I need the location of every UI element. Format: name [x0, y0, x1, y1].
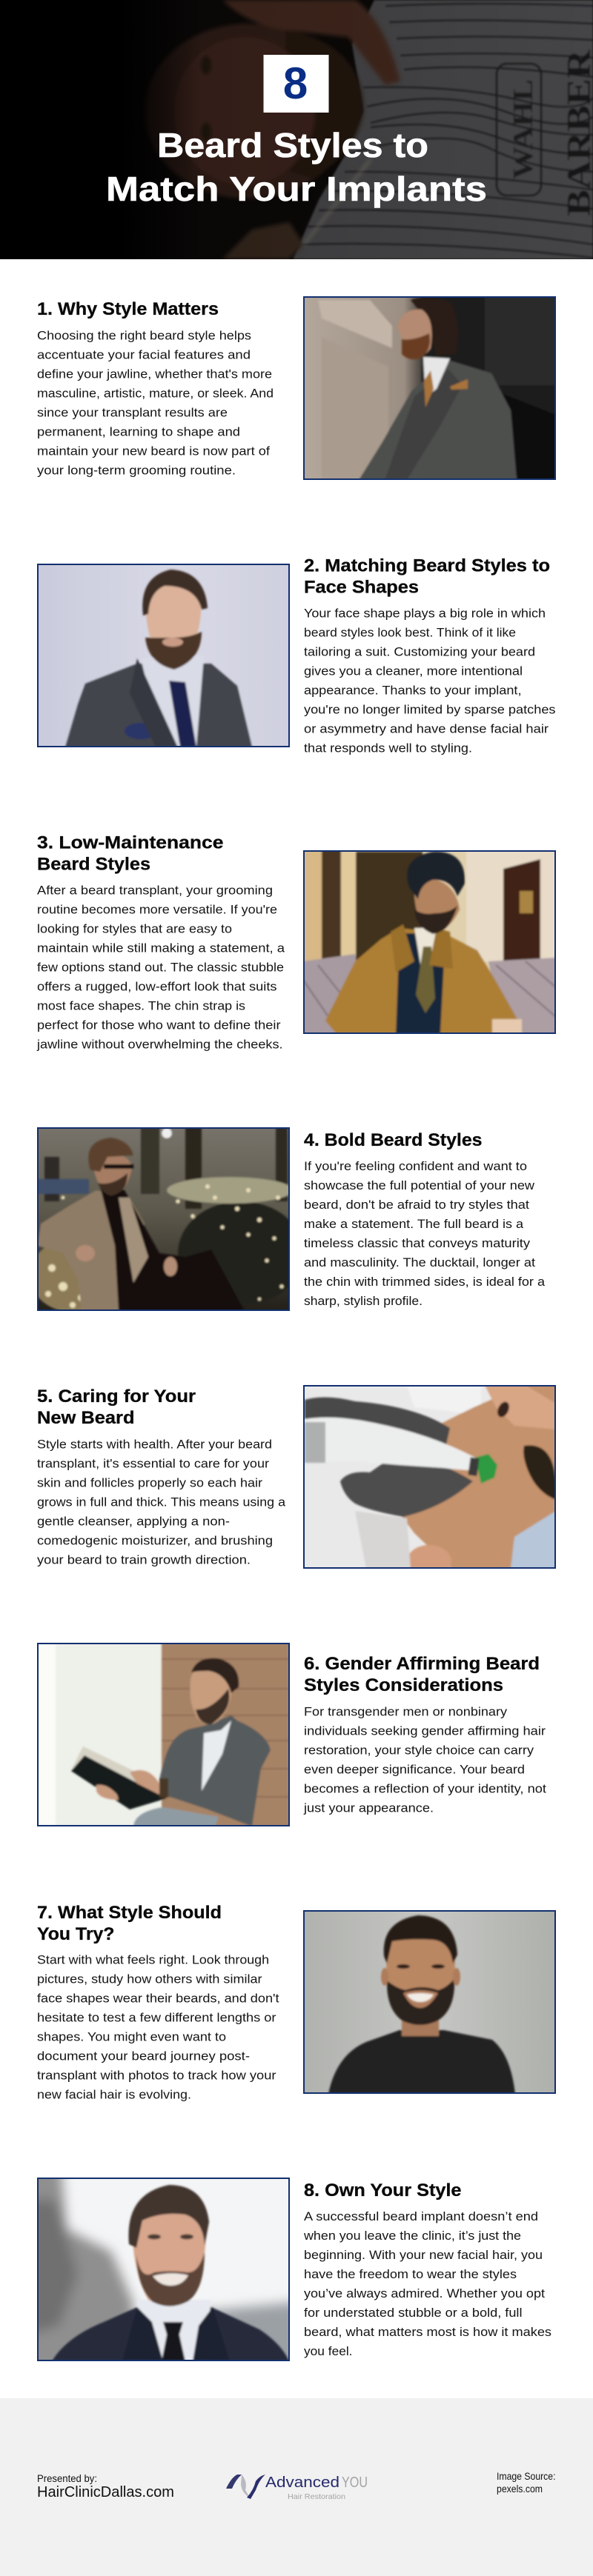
section 7 text: shapes. You might even want to	[37, 2031, 226, 2044]
section 1 text: define your jawline, whether that's more	[37, 367, 272, 381]
section 4 text: 4. Bold Beard Styles	[304, 1130, 482, 1150]
section 6 text: For transgender men or nonbinary	[304, 1705, 508, 1718]
title	[106, 126, 487, 208]
section 5 text: your beard to train growth direction.	[37, 1554, 251, 1567]
section 7 text: Start with what feels right. Look through	[37, 1954, 269, 1967]
logo: AdvancedYOU: Hair Restoration	[288, 2492, 345, 2501]
presented by	[37, 2472, 174, 2500]
section 7 text: hesitate to test a few different lengths or	[37, 2012, 276, 2025]
section 4 text: beard, don't be afraid to try styles that	[304, 1198, 529, 1212]
footer	[0, 2398, 593, 2576]
logo: AdvancedYOU: Advanced	[265, 2475, 339, 2491]
section 7 text: 7. What Style Should	[37, 1903, 222, 1923]
presented by: HairClinicDallas.com	[37, 2484, 174, 2500]
section 3 text: perfect for those who want to define their	[37, 1019, 281, 1032]
section 3 text	[36, 832, 285, 1052]
section 7 text: transplant with photos to track how your	[37, 2069, 276, 2083]
photo 5: laser treatment on beard	[303, 1385, 556, 1578]
section 1 text: 1. Why Style Matters	[37, 299, 219, 319]
section 4 text: timeless classic that conveys maturity	[304, 1237, 531, 1250]
section 6 text: becomes a reflection of your identity, not	[304, 1782, 546, 1795]
section 8 text	[303, 2180, 551, 2358]
section 4 text	[304, 1130, 546, 1308]
section 2 text: or asymmetry and have dense facial hair	[304, 723, 549, 736]
section 3 text: most face shapes. The chin strap is	[37, 1000, 245, 1013]
section 2 text: that responds well to styling.	[304, 742, 472, 755]
section 8 text: for understated stubble or a bold, full	[304, 2306, 522, 2320]
section 8 text: have the freedom to wear the styles	[304, 2268, 517, 2281]
section 6 text: individuals seeking gender affirming hair	[304, 1724, 546, 1738]
section 7 text: new facial hair is evolving.	[37, 2089, 191, 2102]
section 4 text: make a statement. The full beard is a	[304, 1218, 524, 1231]
section 2 text: gives you a cleaner, more intentional	[304, 665, 523, 678]
section 5 text: 5. Caring for Your	[37, 1387, 196, 1407]
title: Beard Styles to	[157, 126, 428, 164]
section 8 text: 8. Own Your Style	[304, 2180, 461, 2200]
section 2 text: Your face shape plays a big role in which	[304, 607, 546, 621]
hero photo background: WAHL	[508, 79, 539, 179]
section 8 text: beginning. With your new facial hair, you	[304, 2249, 543, 2262]
section 4 text: the chin with trimmed sides, is ideal for a	[304, 1275, 546, 1289]
section 3 text: 3. Low-Maintenance	[37, 832, 224, 853]
section 1 text: maintain your new beard is now part of	[37, 444, 270, 458]
number badge	[264, 55, 329, 113]
section 8 text: beard, what matters most is how it makes	[304, 2326, 551, 2339]
section 3 text: looking for styles that are easy to	[37, 923, 232, 936]
section 6 text: just your appearance.	[303, 1801, 434, 1815]
photo 7: smiling man in black t-shirt	[303, 1910, 556, 2094]
section 8 text: you feel.	[304, 2345, 353, 2358]
section 8 text: when you leave the clinic, it’s just the	[303, 2229, 521, 2243]
section 6 text	[303, 1654, 546, 1815]
hero banner	[0, 0, 593, 259]
section 1 text: Choosing the right beard style helps	[37, 329, 251, 342]
section 4 text: and masculinity. The ducktail, longer at	[304, 1256, 535, 1269]
section 3 text: few options stand out. The classic stubble	[37, 961, 284, 975]
section 1 text: masculine, artistic, mature, or sleek. And	[37, 387, 274, 400]
photo 6: man reading a book	[37, 1643, 290, 1826]
photo 8: smiling man in dark suit	[7, 2148, 319, 2392]
section 4 text: showcase the full potential of your new	[304, 1179, 534, 1192]
section 1 text: since your transplant results are	[37, 406, 228, 419]
section 3 text: After a beard transplant, your grooming	[37, 884, 273, 898]
section 1 text: accentuate your facial features and	[37, 348, 251, 361]
section 7 text: document your beard journey post-	[37, 2050, 250, 2063]
section 4 text: If you're feeling confident and want to	[304, 1160, 527, 1173]
section 2 text: you're no longer limited by sparse patches	[304, 704, 556, 717]
section 4 text: sharp, stylish profile.	[304, 1295, 423, 1308]
section 5 text: grows in full and thick. This means using a	[37, 1496, 286, 1509]
section 7 text: You Try?	[37, 1924, 114, 1944]
section 5 text: skin and follicles properly so each hair	[37, 1477, 263, 1490]
section 7 text	[37, 1903, 279, 2102]
section 2 text: Face Shapes	[304, 578, 419, 597]
section 2 text	[304, 555, 556, 755]
section 3 text: maintain while still making a statement, a	[37, 942, 285, 955]
logo: AdvancedYOU	[226, 2475, 368, 2501]
section 6 text: even deeper significance. Your beard	[304, 1763, 525, 1776]
section 1 text: your long-term grooming routine.	[37, 464, 236, 477]
section 8 text: A successful beard implant doesn’t end	[304, 2210, 538, 2223]
photo 4: man on park bench	[30, 1127, 304, 1312]
section 3 text: routine becomes more versatile. If you're	[37, 904, 277, 917]
section 2 text: tailoring a suit. Customizing your beard	[304, 646, 535, 659]
presented by: Presented by:	[37, 2472, 97, 2484]
section 5 text	[37, 1387, 286, 1567]
image source: Image Source:	[497, 2470, 556, 2482]
photo 1: man in grey suit	[303, 296, 556, 480]
section 2 text: beard styles look best. Think of it like	[304, 627, 516, 640]
section 7 text: face shapes wear their beards, and don't	[37, 1992, 279, 2006]
section 2 text: 2. Matching Beard Styles to	[304, 555, 550, 576]
logo: AdvancedYOU: YOU	[342, 2475, 368, 2491]
image source: pexels.com	[497, 2483, 543, 2495]
hero photo background	[0, 0, 593, 259]
section 7 text: pictures, study how others with similar	[37, 1973, 262, 1986]
section 5 text: Style starts with health. After your beard	[37, 1438, 272, 1452]
photo 3: man in tan jacket	[303, 850, 556, 1034]
title: Match Your Implants	[106, 170, 487, 208]
section 1 text: permanent, learning to shape and	[37, 425, 240, 438]
section 6 text: restoration, your style choice can carry	[304, 1744, 534, 1757]
section 6 text: 6. Gender Affirming Beard	[304, 1654, 540, 1674]
section 3 text: jawline without overwhelming the cheeks.	[36, 1038, 283, 1052]
section 5 text: comedogenic moisturizer, and brushing	[37, 1535, 273, 1548]
section 3 text: offers a rugged, low-effort look that suits	[37, 981, 277, 994]
section 3 text: Beard Styles	[37, 855, 150, 874]
section 5 text: transplant, it's essential to care for your	[37, 1458, 270, 1471]
section 8 text: you’ve always admired. Whether you opt	[304, 2287, 545, 2300]
photo 2: man in pinstripe suit	[37, 564, 290, 747]
section 2 text: appearance. Thanks to your implant,	[304, 684, 522, 698]
section 5 text: New Beard	[37, 1408, 135, 1428]
section 6 text: Styles Considerations	[304, 1675, 503, 1695]
section 5 text: gentle cleanser, applying a non-	[37, 1515, 230, 1529]
section 1 text	[37, 299, 274, 477]
number badge: 8	[283, 59, 308, 108]
image source	[497, 2470, 556, 2495]
